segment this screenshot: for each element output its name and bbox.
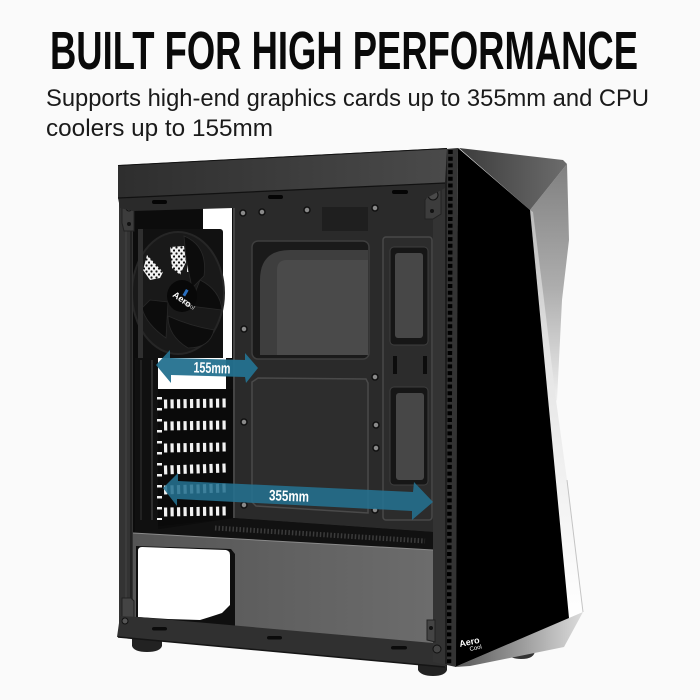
front logo: Aero bbox=[458, 635, 481, 649]
motherboard tray bbox=[234, 197, 434, 532]
rear fan bbox=[132, 229, 224, 358]
upper cable hole bbox=[390, 247, 428, 345]
top panel bbox=[118, 148, 447, 211]
under-lid strip bbox=[118, 183, 445, 211]
arrow: 355mm graphics card clearance bbox=[163, 473, 433, 520]
feet bbox=[132, 636, 535, 676]
fan hub logo: Cool bbox=[182, 300, 195, 312]
PSU shroud bbox=[133, 533, 433, 645]
arrow: 355mm graphics card clearance: 355mm bbox=[269, 487, 309, 506]
top-right tray block bbox=[322, 207, 368, 231]
right frame post bbox=[425, 148, 458, 667]
cable column bbox=[383, 237, 432, 520]
tray screws bbox=[240, 205, 379, 513]
right side panel bbox=[455, 148, 583, 667]
lower recess bbox=[252, 378, 368, 513]
subtitle text: Supports high-end graphics cards up to 355mm and CPU bbox=[46, 85, 649, 112]
fan hub logo bbox=[167, 280, 197, 312]
subtitle text bbox=[46, 85, 649, 142]
fan mesh bbox=[143, 246, 190, 280]
case floor vents bbox=[133, 518, 433, 550]
slot vents bbox=[164, 403, 226, 512]
upper recess bbox=[252, 241, 369, 359]
fan hub logo: Aero bbox=[171, 289, 194, 310]
subtitle text: coolers up to 155mm bbox=[46, 115, 273, 142]
lower cable hole bbox=[390, 387, 428, 485]
rear opening white windows bbox=[158, 207, 232, 389]
left frame post bbox=[119, 197, 134, 632]
tie slots bbox=[393, 356, 427, 374]
arrow: 155mm CPU cooler clearance bbox=[156, 350, 258, 383]
PSU window bbox=[136, 546, 235, 626]
front logo: Cool bbox=[469, 645, 482, 653]
bottom panel bbox=[117, 616, 446, 667]
glossy black front panel bbox=[455, 148, 569, 667]
PC case illustration bbox=[117, 148, 583, 676]
expansion slot brackets bbox=[135, 358, 234, 533]
interior backing bbox=[133, 197, 434, 550]
fan blades bbox=[142, 236, 222, 348]
bracket clips bbox=[157, 397, 162, 520]
arrow: 155mm CPU cooler clearance: 155mm bbox=[193, 359, 231, 378]
